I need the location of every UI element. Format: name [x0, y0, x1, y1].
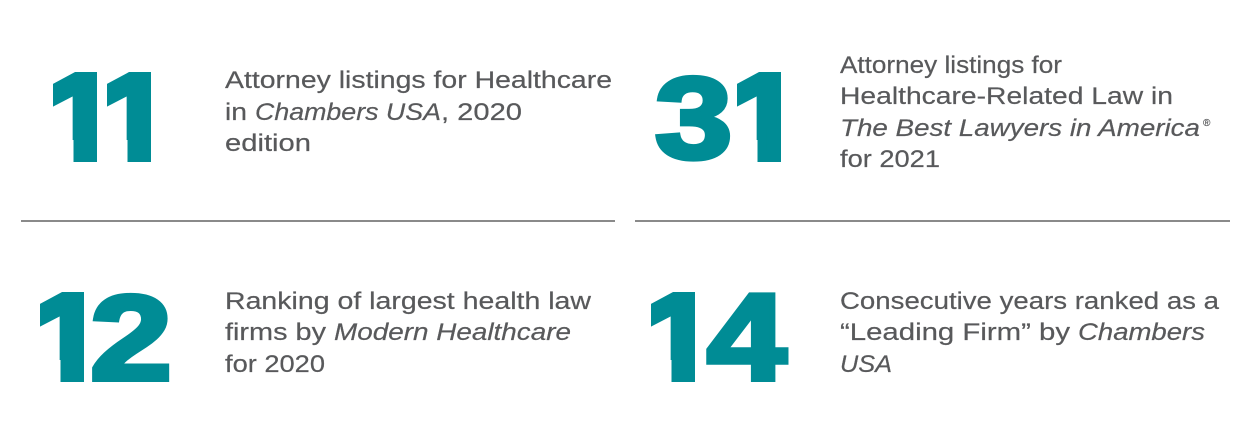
- description: Best Lawyers attorney listings: Attorney listings for: [840, 52, 1062, 79]
- number: 11: [53, 72, 151, 162]
- number: 12: 2: [90, 270, 172, 405]
- description: Chambers leading firm: USA: [840, 351, 892, 378]
- divider: top right: [635, 220, 1230, 222]
- panel: Chambers attorney listings: [53, 70, 611, 162]
- description: Best Lawyers attorney listings: The Best Lawyers in America: [840, 115, 1200, 142]
- description: Modern Healthcare ranking: Modern Healthcare: [334, 319, 571, 346]
- divider: top left: [21, 220, 615, 222]
- number: 31: [655, 72, 781, 162]
- description: Modern Healthcare ranking: [225, 288, 592, 378]
- number: 12: [40, 292, 170, 382]
- panel: Best Lawyers attorney listings: [655, 55, 1210, 168]
- description: Chambers attorney listings: edition: [225, 130, 311, 157]
- panel: Chambers leading firm: [651, 291, 1220, 382]
- description: Chambers attorney listings: in: [225, 99, 247, 126]
- description: Modern Healthcare ranking: for 2020: [225, 351, 325, 378]
- description: Best Lawyers attorney listings: for 2021: [840, 146, 940, 173]
- description: Chambers attorney listings: [225, 67, 612, 157]
- description: Modern Healthcare ranking: firms by: [225, 319, 326, 346]
- description: Chambers attorney listings: Attorney listings for Healthcare: [225, 67, 612, 94]
- number: 31: 1: [727, 48, 809, 186]
- description: Best Lawyers attorney listings: ®: [1203, 118, 1211, 129]
- number: 11: 1: [43, 48, 125, 186]
- description: Best Lawyers attorney listings: [840, 52, 1211, 173]
- number: 14: 1: [641, 268, 723, 406]
- description: Best Lawyers attorney listings: Healthcare-Related Law in: [840, 83, 1173, 110]
- number: 12: 1: [30, 268, 112, 406]
- number: 14: 4: [707, 269, 786, 406]
- description: Chambers leading firm: “Leading Firm” by: [840, 319, 1070, 346]
- description: Chambers leading firm: Consecutive years ranked as a: [840, 288, 1220, 315]
- description: Chambers attorney listings: , 2020: [441, 99, 522, 126]
- panel: Modern Healthcare ranking: [40, 291, 592, 382]
- number: 11: 1: [97, 48, 179, 186]
- description: Chambers leading firm: [840, 288, 1220, 378]
- description: Chambers leading firm: Chambers: [1078, 319, 1205, 346]
- description: Modern Healthcare ranking: Ranking of largest health law: [225, 288, 592, 315]
- number: 31: 3: [655, 54, 732, 183]
- number: 14: [651, 292, 788, 382]
- description: Chambers attorney listings: Chambers USA: [255, 99, 441, 126]
